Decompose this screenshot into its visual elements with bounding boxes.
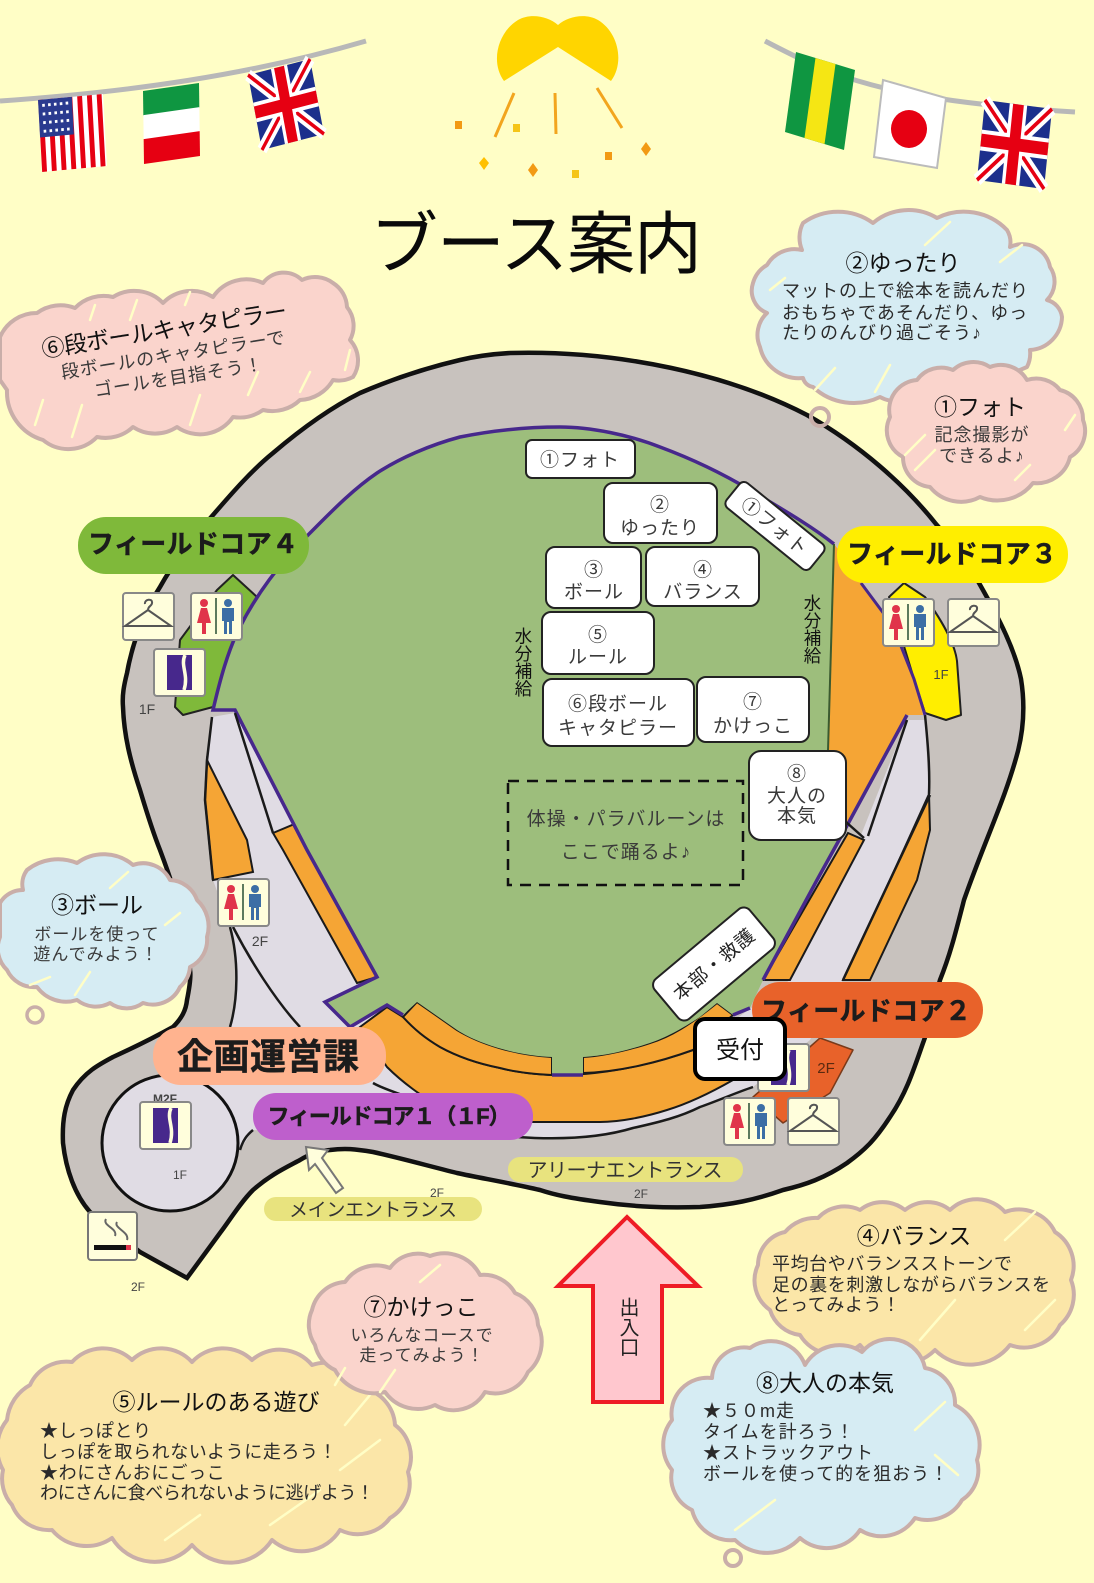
flag: green and yellow (785, 52, 855, 150)
cloud 8 text: ⑧大人の本気 (756, 1370, 894, 1396)
cloud 1: photo (887, 362, 1085, 502)
bunting: right flags (765, 41, 1075, 189)
bunting: left flags (0, 41, 366, 172)
label: planning office (153, 1027, 386, 1085)
floor labels: 2F (131, 1280, 145, 1294)
floor labels: 1F (173, 1168, 187, 1182)
core 3 area (889, 583, 961, 720)
left and lower corridor (172, 713, 843, 1150)
arrow: entrance and exit (558, 1217, 698, 1402)
cloud 5 text: ★しっぽとり (40, 1421, 152, 1441)
cloud 8 text: ★ストラックアウト (703, 1443, 874, 1463)
arrow: entrance and exit: 出入口 (616, 1297, 639, 1357)
cloud 2: relax (752, 210, 1062, 426)
booth: 3 ball: ボール (564, 581, 624, 603)
icon: restroom core 4 (191, 593, 242, 640)
cloud 2 text (782, 250, 1029, 343)
label: field core 3 (837, 526, 1068, 583)
cloud 4 text: 平均台やバランスストーンで (772, 1254, 1013, 1274)
orange seating: left band (273, 823, 377, 983)
arena map (63, 353, 1023, 1294)
label: field core 3: フィールドコア３ (847, 539, 1057, 569)
cloud 8 text: ボールを使って的を狙おう！ (703, 1464, 949, 1484)
booth: 3 ball (546, 547, 641, 608)
label: field core 1 (253, 1093, 533, 1140)
booth: 7 race: かけっこ (713, 716, 793, 737)
title: ブース案内 (370, 207, 702, 283)
cloud 4 text: とってみよう！ (772, 1295, 901, 1315)
floor labels: 2F (634, 1187, 648, 1201)
green field (213, 427, 843, 1075)
booth: 6 cardboard caterpillar (543, 679, 694, 746)
booth: 5 rule (542, 612, 654, 674)
booth: 2 relax: ゆったり (620, 518, 700, 539)
cloud 3 text (33, 892, 160, 964)
cloud 1 text: 記念撮影が (934, 425, 1030, 445)
cloud 8 text (703, 1370, 949, 1484)
booth: 1 photo (526, 440, 635, 478)
booth: 8 grown-ups: 大人の (767, 785, 827, 807)
cloud 6 text (40, 298, 296, 408)
cloud 4 text: 足の裏を刺激しながらバランスを (772, 1275, 1051, 1295)
water label left: 水分補給 (513, 627, 533, 697)
inner black lines (205, 713, 930, 1150)
arena outer concourse (63, 353, 1023, 1278)
cloud 8: grown-ups (663, 1339, 980, 1566)
floor labels: 1F (139, 701, 155, 717)
cloud 3 text: ③ボール (51, 892, 143, 918)
orange seating: upper ring right (583, 1003, 733, 1073)
orange seating: left block (205, 760, 253, 880)
cloud 2 text: マットの上で絵本を読んだり (782, 281, 1029, 301)
icon: locker core 1 (140, 1102, 191, 1149)
label: field core 2: フィールドコア２ (761, 996, 971, 1026)
booth: 6 cardboard caterpillar: ⑥段ボール (568, 693, 668, 715)
booth: 7 race: ⑦ (743, 691, 763, 713)
cloud 4 text: ④バランス (857, 1223, 971, 1249)
floor labels: 2F (430, 1186, 444, 1200)
cloud 7: race (309, 1253, 542, 1410)
cloud 6 text: ⑥段ボールキャタピラー (40, 298, 289, 362)
cloud 5 text: わにさんに食べられないように逃げよう！ (40, 1483, 374, 1503)
booth: headquarters (650, 904, 778, 1024)
cloud 3: ball (0, 854, 209, 1023)
floor labels: M2F (153, 1092, 177, 1106)
floor labels: 1F (933, 667, 949, 682)
flag: Japan (874, 80, 946, 168)
water label right: 水分補給 (802, 594, 822, 664)
label: field core 4: フィールドコア４ (88, 529, 298, 559)
cloud 7 text (350, 1294, 494, 1365)
booth: 7 race (697, 677, 809, 742)
booth: 8 grown-ups: 本気 (777, 805, 817, 827)
circular room (102, 1075, 238, 1211)
core 2 area (753, 1038, 853, 1123)
floor labels: 2F (252, 933, 268, 949)
purple line right of orange block (861, 583, 925, 715)
cloud 5 text: ★わにさんおにごっこ (40, 1463, 225, 1483)
icon: hanger core 3 (948, 599, 999, 646)
dashed dance area: ここで踊るよ♪ (561, 842, 691, 863)
booth: 4 balance: バランス (663, 582, 743, 603)
icon: locker core 4 (154, 649, 205, 696)
pill: arena entrance: アリーナエントランス (528, 1160, 722, 1182)
icon: hanger core 4 (123, 593, 174, 640)
label: field core 4 (78, 517, 309, 574)
flag: UK (977, 100, 1052, 189)
dashed dance area: 体操・パラバルーンは (527, 808, 725, 830)
label: field core 2 (752, 982, 983, 1038)
cloud 7 text: いろんなコースで (350, 1326, 494, 1345)
icon: smoking area (88, 1212, 137, 1260)
purple field boundary (213, 427, 907, 1075)
pill: main entrance: メインエントランス (289, 1200, 457, 1221)
cloud 5 text: しっぽを取られないように走ろう！ (40, 1442, 337, 1462)
arrow: main entrance (306, 1147, 343, 1193)
orange seating: upper ring left (403, 1002, 552, 1075)
green-right line (828, 544, 834, 751)
core 4 area (175, 575, 257, 715)
booth: 1 photo rotated (723, 480, 827, 572)
label: field core 1: フィールドコア１（１F） (268, 1104, 510, 1129)
booth: 5 rule: ルール (568, 647, 628, 668)
booth: 1 photo rotated: ①フォト (736, 493, 812, 561)
orange seating: lower ring (360, 1007, 753, 1122)
label: reception (695, 1019, 785, 1079)
booth: 4 balance (646, 547, 759, 606)
cloud 4: balance (755, 1199, 1074, 1365)
cloud 4 text (772, 1223, 1051, 1315)
cloud 1 text (934, 394, 1030, 466)
booth: 1 photo: ①フォト (540, 449, 620, 471)
cloud 8 text: ★５０m走 (703, 1401, 795, 1421)
cloud 6 text: ゴールを目指そう！ (93, 354, 265, 401)
icon: restroom core 2 (724, 1098, 775, 1145)
cloud 2 text: おもちゃであそんだり、ゆっ (782, 303, 1028, 323)
booth: 8 grown-ups: ⑧ (787, 763, 807, 785)
icon: locker core 2 (758, 1044, 809, 1091)
label: planning office: 企画運営課 (177, 1036, 359, 1077)
cloud 5 text: ⑤ルールのある遊び (112, 1389, 320, 1415)
booth: headquarters: 本部・救護 (669, 924, 760, 1005)
cloud 1 text: できるよ♪ (939, 446, 1025, 466)
booth: 2 relax: ② (650, 494, 670, 516)
cloud 7 text: 走ってみよう！ (359, 1346, 485, 1365)
floor labels (131, 667, 949, 1294)
cloud 5 text (40, 1389, 374, 1503)
floor labels: 2F (817, 1060, 835, 1077)
dashed dance area (508, 781, 743, 885)
cloud 5: rule (0, 1348, 411, 1563)
lamp and sparkle decoration (455, 16, 651, 178)
cloud 8 text: タイムを計ろう！ (703, 1422, 855, 1442)
orange seating: right block (828, 544, 923, 833)
cloud 1 text: ①フォト (934, 394, 1026, 420)
label: reception: 受付 (716, 1037, 764, 1064)
right corridor (790, 720, 929, 980)
booth: 3 ball: ③ (584, 559, 604, 581)
orange seating: right bands (763, 794, 930, 980)
icon: restroom core 3 (883, 599, 934, 646)
cloud 3 text: ボールを使って (34, 924, 160, 944)
cloud 7 text: ⑦かけっこ (364, 1294, 478, 1320)
booth: 6 cardboard caterpillar: キャタピラー (558, 717, 678, 739)
flag: USA (38, 94, 107, 172)
booth: 8 grown-ups (749, 751, 846, 840)
icon: restroom 2F west (218, 879, 269, 926)
booth: 5 rule: ⑤ (588, 624, 608, 646)
pill: main entrance (264, 1197, 482, 1221)
icon: hanger core 2 (788, 1098, 839, 1145)
cloud 3 text: 遊んでみよう！ (33, 945, 159, 964)
cloud 2 text: たりのんびり過ごそう♪ (782, 323, 982, 343)
cloud 6: cardboard caterpillar (0, 273, 358, 449)
cloud 2 text: ②ゆったり (846, 250, 960, 276)
flag: Italy (143, 83, 200, 164)
booth: 4 balance: ④ (693, 559, 713, 581)
cloud 6 text: 段ボールのキャタピラーで (60, 327, 287, 383)
flag: UK (248, 59, 324, 150)
booth: 2 relax (604, 483, 717, 543)
